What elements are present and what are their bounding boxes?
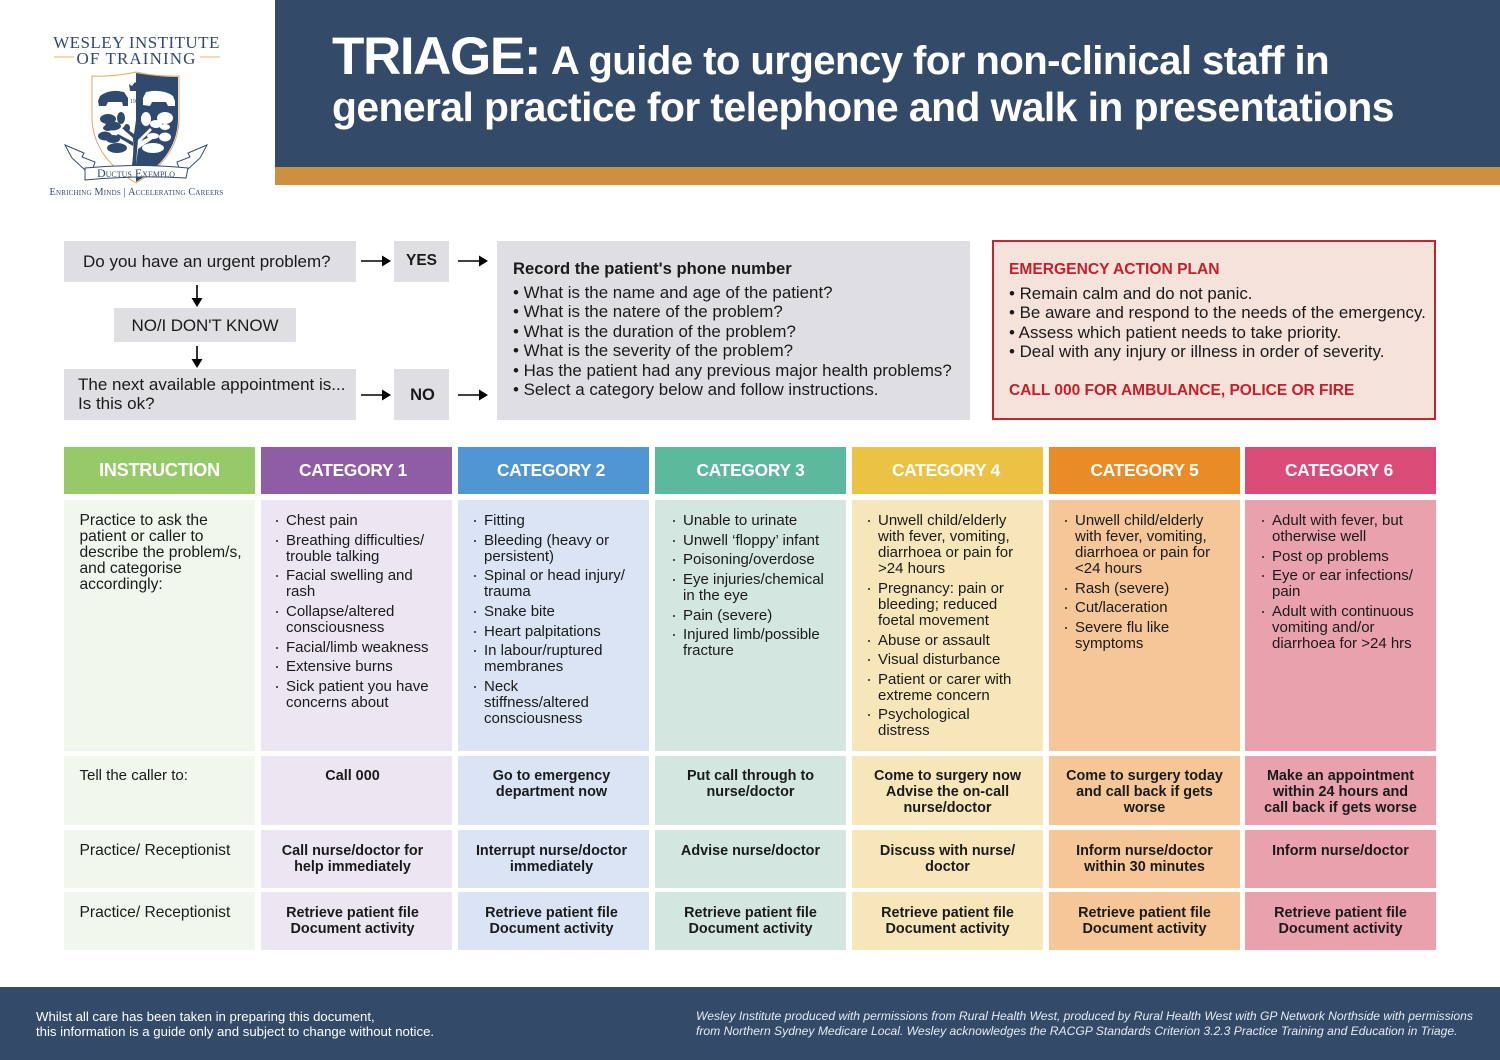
action: category 5 tell: worse	[1124, 800, 1165, 816]
header: instruction: INSTRUCTION	[99, 460, 220, 480]
category 1 symptoms: Breathing difficulties/	[286, 532, 424, 549]
category 2 symptoms: Spinal or head injury/	[484, 567, 625, 584]
accent strip	[275, 167, 1500, 185]
icon: crest: 1998	[130, 99, 142, 105]
category 4 symptoms	[868, 512, 1013, 739]
header: instruction	[64, 447, 255, 494]
action: category 1 practice	[282, 843, 423, 875]
flow box: yes	[394, 241, 449, 282]
action: category 5 tell: and call back if gets	[1076, 784, 1213, 800]
action: category 5 file: Document activity	[1083, 921, 1206, 937]
action: category 3 file: Retrieve patient file	[684, 905, 817, 921]
instruction text: Practice to ask the	[80, 512, 208, 529]
flow box: no / don't know	[114, 308, 296, 342]
header: category 5: CATEGORY 5	[1090, 460, 1199, 480]
header: category 3: CATEGORY 3	[696, 460, 805, 480]
category 6 symptoms: Eye or ear infections/	[1272, 567, 1413, 584]
category 2 symptoms: Snake bite	[484, 603, 555, 620]
category 6 symptoms: diarrhoea for >24 hrs	[1272, 635, 1412, 652]
header: category 2	[458, 447, 649, 494]
category 3 symptoms: Injured limb/possible	[683, 626, 820, 643]
row label: practice receptionist file: Practice/ Receptionist	[80, 904, 230, 921]
logo	[50, 33, 223, 198]
category 6 symptoms: Adult with fever, but	[1272, 512, 1403, 529]
category 2 symptoms: Bleeding (heavy or	[484, 532, 609, 549]
emergency list	[1009, 284, 1426, 361]
flow box: next appointment	[64, 369, 356, 420]
category 1 symptoms: Extensive burns	[286, 658, 393, 675]
action: category 3 tell: nurse/doctor	[707, 784, 794, 800]
category 1 symptoms: Facial swelling and	[286, 567, 413, 584]
action: category 4 tell	[874, 768, 1022, 816]
action: category 2 practice	[476, 843, 627, 875]
action: category 5 tell	[1066, 768, 1223, 816]
category 2 symptoms: stiffness/altered	[484, 694, 589, 711]
logo name: OF TRAINING	[77, 49, 196, 68]
action: category 3 tell: Put call through to	[687, 768, 814, 784]
instruction text: patient or caller to	[80, 528, 203, 545]
category 1 symptoms: trouble talking	[286, 548, 379, 565]
action: category 6 tell: within 24 hours and	[1273, 784, 1408, 800]
disclaimer	[36, 1009, 434, 1039]
questions list: • What is the natere of the problem?	[513, 302, 783, 321]
category 6 symptoms: Post op problems	[1272, 548, 1389, 565]
action: category 1 practice: help immediately	[294, 859, 411, 875]
action: category 5 practice: within 30 minutes	[1084, 859, 1205, 875]
action: category 5 practice	[1076, 843, 1213, 875]
category 1 symptoms: Sick patient you have	[286, 678, 429, 695]
header: category 4: CATEGORY 4	[892, 460, 1000, 480]
category 1 symptoms: Facial/limb weakness	[286, 639, 429, 656]
category 4 symptoms: bleeding; reduced	[878, 596, 997, 613]
action: category 4 tell: nurse/doctor	[904, 800, 991, 816]
category 5 symptoms: with fever, vomiting,	[1075, 528, 1207, 545]
logo tagline: Enriching Minds | Accelerating Careers	[50, 187, 223, 198]
header: category 2: CATEGORY 2	[497, 460, 605, 480]
action: category 1 file	[286, 905, 419, 937]
header: category 4	[852, 447, 1043, 494]
header: category 3	[655, 447, 846, 494]
action: category 5 practice: Inform nurse/doctor	[1076, 843, 1213, 859]
disclaimer: Whilst all care has been taken in preparing this document,	[36, 1009, 375, 1024]
category 2 symptoms: membranes	[484, 658, 563, 675]
panel: patient questions	[497, 241, 970, 420]
header: category 1: CATEGORY 1	[299, 460, 407, 480]
header: category 6	[1245, 447, 1436, 494]
questions list: • What is the severity of the problem?	[513, 341, 793, 360]
flow box: no	[394, 369, 449, 420]
category 5 symptoms: <24 hours	[1075, 560, 1142, 577]
category 5 symptoms: Severe flu like	[1075, 619, 1169, 636]
action: category 6 tell	[1264, 768, 1417, 816]
header: category 5	[1049, 447, 1240, 494]
category 3 symptoms: Poisoning/overdose	[683, 551, 815, 568]
logo name	[53, 33, 220, 68]
questions list: • Select a category below and follow instructions.	[513, 380, 878, 399]
flow box: next appointment: The next available appointment is...	[78, 375, 345, 394]
icon: crest: Ductus Exemplo	[97, 166, 175, 180]
action: category 6 file: Retrieve patient file	[1274, 905, 1407, 921]
action: category 2 practice: Interrupt nurse/doctor	[476, 843, 627, 859]
title	[332, 27, 1394, 130]
action: category 6 file	[1274, 905, 1407, 937]
category 4 symptoms: Visual disturbance	[878, 651, 1000, 668]
category 1 symptoms: Chest pain	[286, 512, 358, 529]
action: category 2 file: Document activity	[490, 921, 613, 937]
instruction text: describe the problem/s,	[80, 544, 242, 561]
category 3 symptoms: Unable to urinate	[683, 512, 797, 529]
flow arrows	[192, 256, 488, 400]
action: category 3 file: Document activity	[689, 921, 812, 937]
category 6 symptoms: Adult with continuous	[1272, 603, 1414, 620]
action: category 4 tell: Advise the on-call	[886, 784, 1009, 800]
instruction text: accordingly:	[80, 576, 163, 593]
category 5 symptoms	[1065, 512, 1210, 652]
category 3 symptoms: in the eye	[683, 587, 748, 604]
questions list: • Has the patient had any previous major health problems?	[513, 361, 952, 380]
category 6 symptoms: otherwise well	[1272, 528, 1366, 545]
emergency list: • Assess which patient needs to take priority.	[1009, 323, 1341, 342]
instruction text: and categorise	[80, 560, 182, 577]
action: category 4 practice: Discuss with nurse/	[880, 843, 1015, 859]
emergency call: CALL 000 FOR AMBULANCE, POLICE OR FIRE	[1009, 382, 1354, 399]
action: category 5 file: Retrieve patient file	[1078, 905, 1211, 921]
category 2 symptoms: persistent)	[484, 548, 554, 565]
action: category 4 file: Retrieve patient file	[881, 905, 1014, 921]
category 4 symptoms: Patient or carer with	[878, 671, 1011, 688]
action: category 2 file: Retrieve patient file	[485, 905, 618, 921]
category 3 symptoms: Eye injuries/chemical	[683, 571, 824, 588]
category 2 symptoms: consciousness	[484, 710, 582, 727]
action: category 2 file	[485, 905, 618, 937]
category 6 symptoms: pain	[1272, 583, 1300, 600]
action: category 3 file	[684, 905, 817, 937]
action: category 5 tell: Come to surgery today	[1066, 768, 1223, 784]
category 1 symptoms: concerns about	[286, 694, 389, 711]
category 4 symptoms: foetal movement	[878, 612, 989, 629]
action: category 4 file	[881, 905, 1014, 937]
action: category 4 file: Document activity	[886, 921, 1009, 937]
flow box: next appointment: Is this ok?	[78, 394, 155, 413]
category 2 symptoms: Fitting	[484, 512, 525, 529]
category 4 symptoms: Pregnancy: pain or	[878, 580, 1004, 597]
action: category 3 practice: Advise nurse/doctor	[681, 843, 820, 859]
icon: crest	[54, 56, 220, 184]
row label: practice receptionist: Practice/ Receptionist	[80, 842, 230, 859]
category 1 symptoms: consciousness	[286, 619, 384, 636]
category 1 symptoms: rash	[286, 583, 315, 600]
category 3 symptoms: Unwell ‘floppy’ infant	[683, 532, 819, 549]
category 3 symptoms	[673, 512, 824, 659]
action: category 1 tell: Call 000	[325, 768, 380, 784]
action: category 2 tell	[493, 768, 610, 800]
panel: emergency action plan	[992, 240, 1436, 420]
questions list: • What is the duration of the problem?	[513, 322, 796, 341]
category 2 symptoms: Heart palpitations	[484, 623, 601, 640]
category 4 symptoms: distress	[878, 722, 930, 739]
footer	[0, 987, 1500, 1060]
action: category 5 file	[1078, 905, 1211, 937]
action: category 2 tell: Go to emergency	[493, 768, 610, 784]
title: TRIAGE: A guide to urgency for non-clinical staff in	[332, 27, 1329, 86]
category 4 symptoms: with fever, vomiting,	[878, 528, 1010, 545]
credits: from Northern Sydney Medicare Local. Wesley acknowledges the RACGP Standards Criterion 3.2.3 Practice Training and Education in Triage.	[696, 1024, 1457, 1038]
emergency list: • Remain calm and do not panic.	[1009, 284, 1252, 303]
category 4 symptoms: extreme concern	[878, 687, 990, 704]
category 1 symptoms	[276, 512, 429, 711]
flow box: yes: YES	[406, 252, 437, 269]
action: category 4 tell: Come to surgery now	[874, 768, 1021, 784]
action: category 2 tell: department now	[496, 784, 607, 800]
logo name: WESLEY INSTITUTE	[53, 33, 220, 52]
row label: tell the caller: Tell the caller to:	[80, 767, 188, 784]
action: category 3 tell	[687, 768, 814, 800]
category 4 symptoms: Abuse or assault	[878, 632, 990, 649]
emergency list: • Deal with any injury or illness in order of severity.	[1009, 342, 1384, 361]
category 3 symptoms: fracture	[683, 642, 734, 659]
category 3 symptoms: Pain (severe)	[683, 607, 772, 624]
instruction text	[80, 512, 242, 593]
flow box: no / don't know: NO/I DON'T KNOW	[132, 316, 278, 335]
action: category 6 tell: call back if gets worse	[1264, 800, 1417, 816]
credits: Wesley Institute produced with permissions from Rural Health West, produced by Rural Health West with GP Network Northside with permissions	[696, 1009, 1473, 1023]
category 4 symptoms: Psychological	[878, 706, 970, 723]
category 2 symptoms	[474, 512, 625, 727]
header: category 1	[261, 447, 452, 494]
flow box: no: NO	[410, 386, 435, 404]
action: category 2 practice: immediately	[510, 859, 593, 875]
category 4 symptoms: diarrhoea or pain for	[878, 544, 1013, 561]
category 4 symptoms: Unwell child/elderly	[878, 512, 1006, 529]
action: category 1 practice: Call nurse/doctor for	[282, 843, 423, 859]
action: category 6 tell: Make an appointment	[1267, 768, 1414, 784]
flow box: urgent question	[64, 241, 356, 282]
action: category 6 practice: Inform nurse/doctor	[1272, 843, 1409, 859]
questions list: • What is the name and age of the patient?	[513, 283, 833, 302]
category 2 symptoms: Neck	[484, 678, 518, 695]
category 6 symptoms: vomiting and/or	[1272, 619, 1375, 636]
action: category 1 file: Document activity	[291, 921, 414, 937]
category 5 symptoms: diarrhoea or pain for	[1075, 544, 1210, 561]
action: category 1 file: Retrieve patient file	[286, 905, 419, 921]
action: category 6 file: Document activity	[1279, 921, 1402, 937]
category 5 symptoms: Rash (severe)	[1075, 580, 1169, 597]
category 2 symptoms: trauma	[484, 583, 531, 600]
flow box: urgent question: Do you have an urgent problem?	[83, 252, 331, 271]
category 2 symptoms: In labour/ruptured	[484, 642, 602, 659]
emergency list: • Be aware and respond to the needs of the emergency.	[1009, 303, 1426, 322]
category 4 symptoms: >24 hours	[878, 560, 945, 577]
action: category 4 practice: doctor	[925, 859, 970, 875]
category 5 symptoms: Unwell child/elderly	[1075, 512, 1203, 529]
category 5 symptoms: symptoms	[1075, 635, 1143, 652]
category 6 symptoms	[1262, 512, 1414, 652]
disclaimer: this information is a guide only and subject to change without notice.	[36, 1024, 434, 1039]
header: category 6: CATEGORY 6	[1285, 460, 1393, 480]
category 1 symptoms: Collapse/altered	[286, 603, 394, 620]
questions heading: Record the patient's phone number	[513, 259, 792, 278]
category 5 symptoms: Cut/laceration	[1075, 599, 1168, 616]
title: general practice for telephone and walk in presentations	[332, 84, 1394, 130]
emergency heading: EMERGENCY ACTION PLAN	[1009, 261, 1220, 278]
action: category 4 practice	[880, 843, 1015, 875]
questions list	[513, 283, 952, 399]
credits	[696, 1009, 1473, 1038]
header banner	[275, 0, 1500, 185]
